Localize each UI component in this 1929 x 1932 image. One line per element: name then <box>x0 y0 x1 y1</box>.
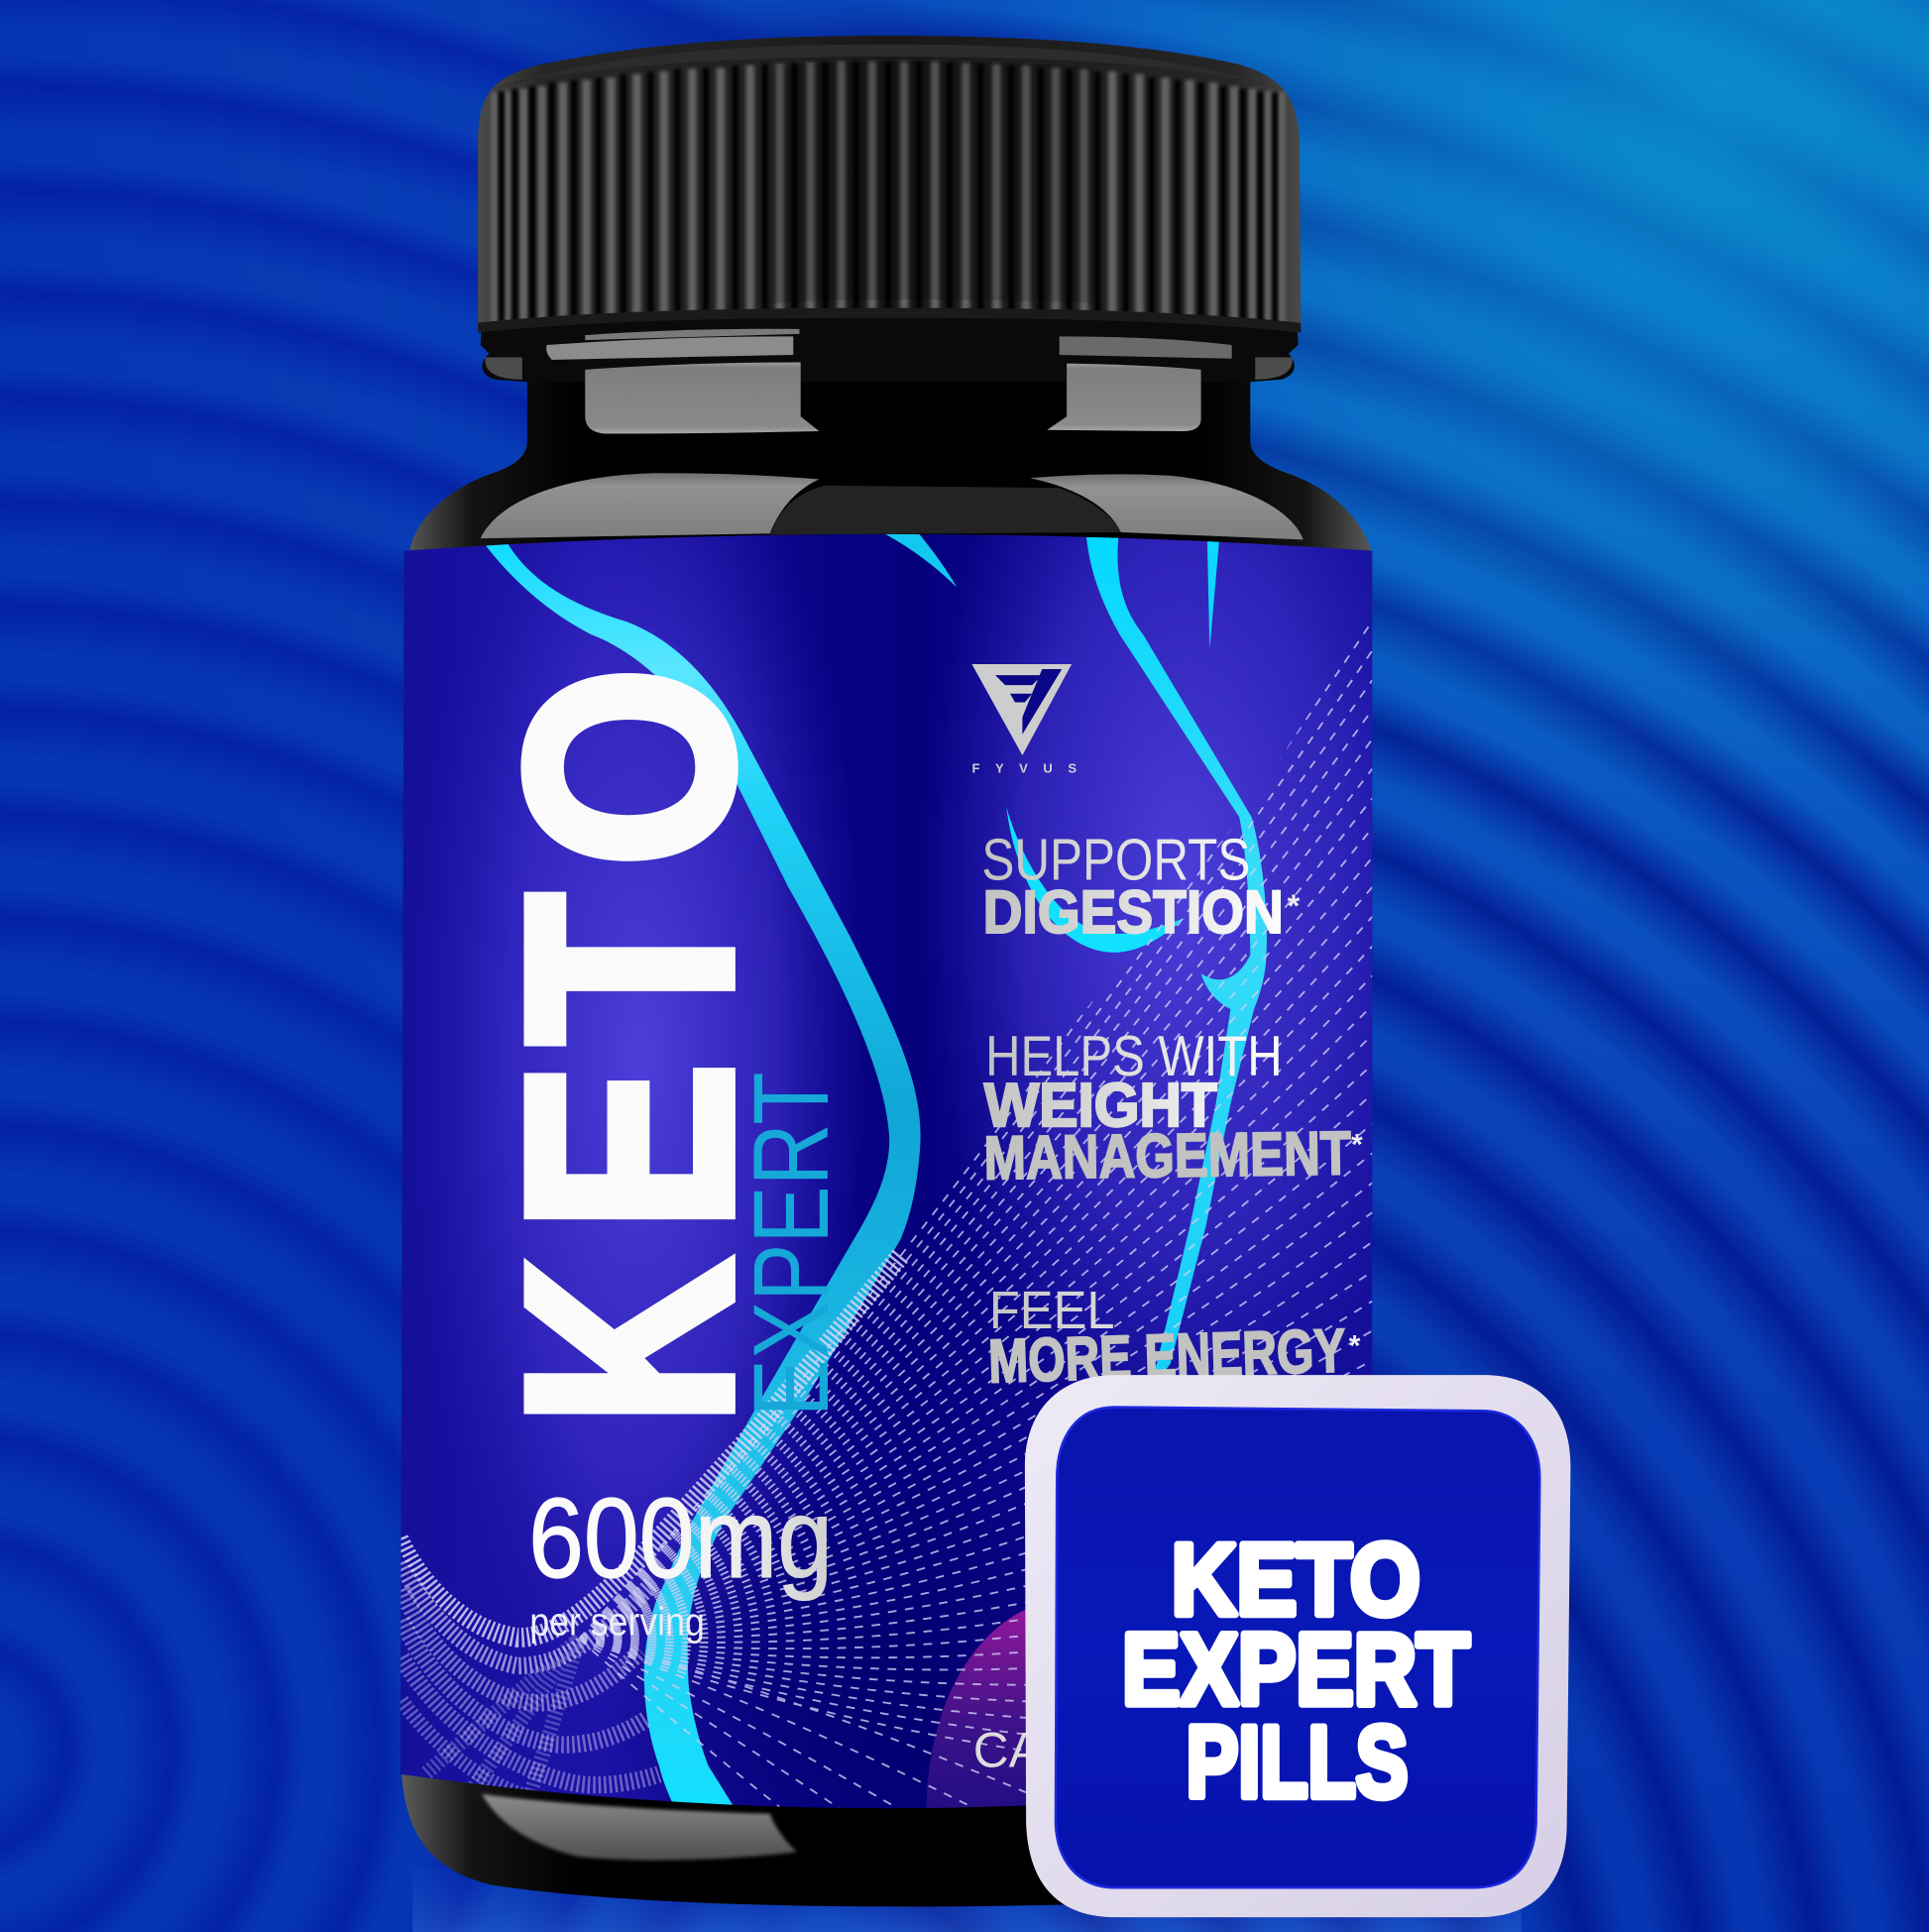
claim: feel more energy: FEEL <box>989 1282 1115 1340</box>
label base <box>400 534 1372 1808</box>
cap lower edge <box>478 308 1301 333</box>
claim: supports digestion <box>981 826 1301 946</box>
claim: feel more energy: MORE ENERGY <box>987 1316 1346 1397</box>
claim: supports digestion: DIGESTION <box>983 878 1284 946</box>
per serving: per serving <box>529 1600 705 1644</box>
KETO vertical title: K <box>465 1259 793 1425</box>
dosage: 600mg <box>528 1476 833 1602</box>
label glow right <box>938 535 1372 1375</box>
badge frame <box>1025 1375 1570 1917</box>
claim: feel more energy: * <box>1349 1329 1361 1362</box>
label <box>400 533 1372 1808</box>
KETO vertical title <box>465 666 793 1425</box>
KETO vertical title: E <box>465 1062 793 1232</box>
logo <box>971 664 1077 775</box>
claim: helps with weight management: WEIGHT <box>984 1072 1217 1140</box>
neck and rim highlights <box>546 329 1232 434</box>
bottle body <box>401 370 1372 1906</box>
ring bulge shading <box>485 357 1293 380</box>
cyan crescent <box>1006 807 1185 953</box>
cap lower ring <box>481 308 1299 382</box>
label glow left <box>447 535 850 1640</box>
claim: helps with weight management <box>983 1025 1363 1193</box>
dashed fan lines <box>579 592 1372 1824</box>
badge title <box>1122 1523 1469 1818</box>
claim: helps with weight management: MANAGEMENT <box>983 1119 1351 1193</box>
badge title: EXPERT <box>1122 1613 1469 1726</box>
cyan body curve right <box>1086 537 1267 1405</box>
bottom highlight <box>482 1794 797 1861</box>
cap centre panel <box>773 61 1093 303</box>
badge panel <box>1056 1407 1539 1887</box>
bottom dark fade <box>688 1537 1025 1808</box>
shoulder highlights <box>481 473 1304 539</box>
logo wordmark: FYVUS <box>971 760 1077 775</box>
capsule count, cut off: CA <box>973 1722 1043 1777</box>
EXPERT vertical subtitle: EXPERT <box>731 1072 851 1417</box>
cyan body curve top <box>882 532 958 588</box>
cyan body curve left <box>484 543 921 1811</box>
badge title: PILLS <box>1187 1705 1408 1818</box>
claim: supports digestion: * <box>1288 888 1301 924</box>
badge title: KETO <box>1172 1523 1420 1636</box>
cap shell <box>478 36 1301 330</box>
cyan spike <box>1207 537 1219 649</box>
claim: helps with weight management: HELPS WITH <box>985 1025 1283 1088</box>
product illustration <box>400 36 1570 1932</box>
badge <box>1025 1375 1570 1917</box>
cap dark ribs <box>502 61 1275 324</box>
logo mark <box>971 664 1072 755</box>
dotted wave pattern <box>401 592 1372 1824</box>
cap light ribs <box>496 61 1281 324</box>
claim: supports digestion: SUPPORTS <box>981 826 1250 892</box>
KETO vertical title: O <box>465 666 793 867</box>
cap rim top <box>493 45 1281 88</box>
purple circle <box>926 1610 1026 1808</box>
bottle <box>401 36 1372 1906</box>
KETO vertical title: T <box>465 893 793 1045</box>
reflection under bottle <box>412 1867 1522 1932</box>
claim: helps with weight management: * <box>1351 1129 1363 1162</box>
claim: feel more energy <box>987 1282 1361 1397</box>
cap <box>478 36 1301 333</box>
hatch along wave edge <box>401 1254 902 1801</box>
